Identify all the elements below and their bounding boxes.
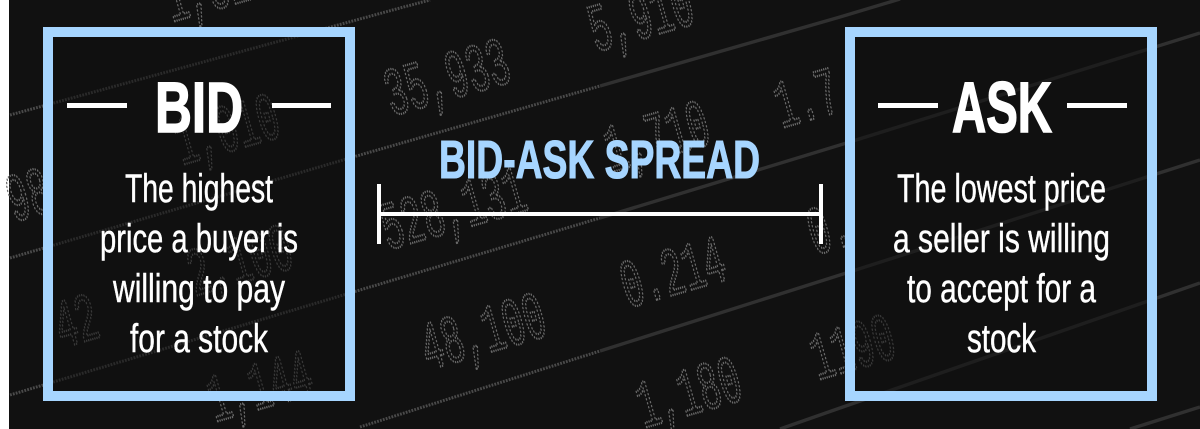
ask description: a seller is willing — [893, 217, 1110, 261]
ask description: stock — [967, 317, 1036, 361]
bid heading right dash — [272, 103, 331, 108]
background: dark stock ticker board: 42 — [47, 283, 108, 369]
background: dark stock ticker board: 48,100 — [413, 282, 556, 391]
ask description: The lowest price — [897, 167, 1106, 211]
background: dark stock ticker board: 528,131 — [373, 156, 536, 271]
background: dark stock ticker board: 1,010 — [167, 83, 289, 186]
background: dark stock ticker board: 1190 — [803, 304, 905, 401]
background: dark stock ticker board: 1,710 — [597, 90, 719, 193]
bid description — [100, 167, 298, 361]
bid heading left dash — [67, 103, 127, 108]
spread heading: BID-ASK SPREAD — [439, 130, 760, 190]
panel: ask — [850, 32, 1152, 396]
ask description: to accept for a — [907, 267, 1096, 311]
bid description: price a buyer is — [100, 217, 298, 261]
background: dark stock ticker board: 1.7 — [767, 57, 849, 149]
background: dark stock ticker board: 2,100 — [180, 214, 302, 317]
ask box frame — [850, 32, 1152, 396]
background: dark stock ticker board: 0.214 — [613, 226, 735, 329]
ask heading: ASK — [952, 69, 1052, 148]
bid box frame — [48, 32, 350, 396]
ask heading left dash — [878, 103, 938, 108]
background: dark stock ticker board: 0. — [800, 190, 861, 276]
bid description: for a stock — [130, 317, 268, 361]
bid description: The highest — [125, 167, 273, 211]
spread bracket arrow — [377, 184, 823, 244]
bid heading: BID — [155, 69, 243, 148]
ask description — [893, 167, 1110, 361]
panel: bid — [48, 32, 350, 396]
background: dark stock ticker board: 98 — [0, 157, 60, 243]
background: dark stock ticker board: 35,933 — [377, 28, 520, 137]
bid description: willing to pay — [112, 267, 285, 311]
ask heading right dash — [1067, 103, 1127, 108]
